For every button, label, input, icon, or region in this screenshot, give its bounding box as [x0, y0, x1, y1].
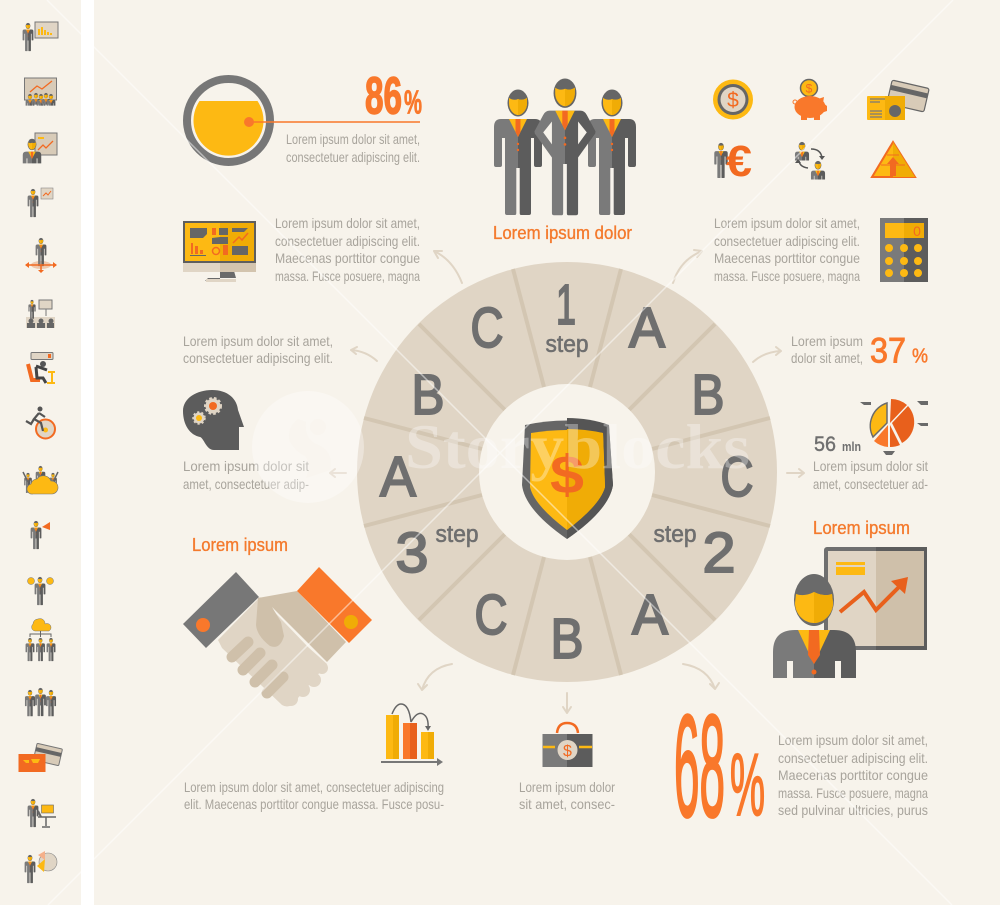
wheel labels: B: [550, 607, 584, 671]
icon: meeting room presenter: [26, 300, 55, 328]
icon: briefcase with dollar: $: [563, 743, 572, 760]
arrow: to monitor block: [434, 251, 462, 283]
icon: person with euro: €: [726, 137, 752, 186]
arrow: to 37 percent: [753, 347, 781, 362]
wheel labels: A: [632, 583, 668, 647]
wheel hub: [479, 384, 655, 560]
text: 68 percent paragraph: [778, 732, 928, 818]
text: pie caption: Lorem ipsum dolor sit: [813, 458, 928, 474]
arrow: to briefcase: [563, 693, 571, 713]
icon: runner with clock target: [26, 406, 55, 438]
wheel labels: step: [436, 521, 478, 548]
text: brain caption: [183, 458, 309, 492]
stat: 37% with caption: dolor sit amet,: [791, 350, 863, 366]
icon: exchange between two people: [795, 142, 825, 180]
text: bar chart caption: elit. Maecenas porttitor congue massa. Fusce posu-: [184, 796, 444, 812]
text: brain caption: Lorem ipsum dolor sit: [183, 458, 309, 474]
icon: presenter with small board: [28, 188, 53, 217]
stat: 86%: %: [404, 84, 422, 120]
icon: team on cloud: [23, 466, 58, 494]
icon: piggy bank: [793, 80, 827, 120]
wheel labels: 1: [556, 273, 576, 337]
sidebar separator band: [81, 0, 94, 905]
icon: cards: [18, 743, 62, 772]
heading: handshake: Lorem ipsum: [192, 535, 288, 555]
icon: bar chart with arcs: [381, 704, 443, 766]
text: briefcase caption: Lorem ipsum dolor: [519, 779, 615, 795]
text: top right paragraph: massa. Fusce posuere, magna: [714, 268, 860, 284]
icon: handshake: [183, 567, 372, 706]
stat: 56 mln: 56: [814, 433, 836, 456]
watermark: Storyblocks: [405, 411, 750, 482]
text: pie caption: amet, consectetuer ad-: [813, 476, 928, 492]
text: bar chart caption: [184, 779, 444, 812]
wheel diagram: [357, 262, 777, 682]
icon: calculator: 0: [913, 223, 921, 239]
icon: presenter with growth board: [773, 547, 927, 678]
wheel labels: C: [470, 296, 504, 360]
wheel labels: A: [380, 445, 416, 509]
arrow: to pie block: [787, 469, 804, 477]
text: gauge caption: Lorem ipsum dolor sit amet,: [286, 131, 420, 147]
text: pie caption: [813, 458, 928, 492]
text: 68 percent paragraph: sed pulvinar ultricies, purus: [778, 802, 928, 818]
icon: pyramid with arrow: [872, 142, 915, 177]
text: top right paragraph: [714, 215, 860, 284]
text: briefcase caption: sit amet, consec-: [519, 796, 615, 812]
icon: tired worker at desk: [28, 352, 55, 383]
wheel spokes: [364, 269, 770, 675]
wheel labels: [380, 273, 754, 671]
text: left short paragraph: [183, 333, 333, 366]
stat: 56 mln: [814, 433, 861, 456]
icon: briefcase with dollar: [542, 723, 592, 767]
text: monitor paragraph: Maecenas porttitor congue: [275, 250, 420, 266]
icon: monitor dashboard: [183, 221, 256, 282]
arrow: to brain block: [330, 469, 346, 477]
icon: shield with dollar: $: [550, 445, 584, 505]
text: left short paragraph: Lorem ipsum dolor sit amet,: [183, 333, 333, 349]
icon: coin: [713, 80, 753, 120]
text: top right paragraph: Lorem ipsum dolor sit amet,: [714, 215, 860, 231]
text: gauge caption: consectetuer adipiscing elit.: [286, 149, 420, 165]
stat: 37% with caption: [791, 332, 928, 370]
icon: person with direction arrows: [25, 238, 57, 273]
text: monitor paragraph: [275, 215, 420, 284]
heading: presenter: Lorem ipsum: [813, 518, 910, 538]
icon: audience with growth board: [24, 78, 56, 106]
icon: person with pie chart: [25, 851, 57, 883]
icon: presenter with chart board: [23, 22, 58, 51]
stat: 68%: [674, 685, 765, 847]
stat: 86%: 86: [365, 68, 402, 126]
icon: coin: $: [727, 89, 739, 112]
heading: team: Lorem ipsum dolor: [493, 223, 632, 243]
arrow: to top right block: [673, 250, 702, 283]
wheel labels: C: [474, 583, 508, 647]
stat: 56 mln: mln: [842, 439, 861, 454]
text: 68 percent paragraph: Maecenas porttitor congue: [778, 767, 928, 783]
icon: calculator: [880, 218, 928, 282]
icon: shield with dollar: [522, 418, 613, 539]
text: 68 percent paragraph: consectetuer adipiscing elit.: [778, 750, 928, 766]
icon: payment cards: [867, 80, 929, 120]
text: left short paragraph: consectetuer adipiscing elit.: [183, 350, 333, 366]
icon: piggy bank: $: [806, 82, 813, 96]
icon: person with two coins: [28, 577, 54, 605]
icon: bust with board: [23, 133, 57, 163]
icon: pie chart bulb: [860, 399, 928, 455]
figure: centre person arms akimbo: [534, 78, 596, 215]
arrow: to left paragraph: [351, 347, 377, 361]
text: top right paragraph: Maecenas porttitor congue: [714, 250, 860, 266]
icon: head with gears: [183, 390, 244, 450]
icon: three business people: [25, 688, 56, 716]
text: top right paragraph: consectetuer adipiscing elit.: [714, 233, 860, 249]
wheel disc: [357, 262, 777, 682]
text: 68 percent paragraph: Lorem ipsum dolor sit amet,: [778, 732, 928, 748]
stat: 37% with caption: Lorem ipsum: [791, 333, 863, 349]
icon: person at desk with screen: [28, 799, 56, 827]
text: brain caption: amet, consectetuer adip-: [183, 476, 309, 492]
wheel labels: 3: [396, 521, 428, 585]
wheel labels: B: [412, 363, 444, 427]
text: monitor paragraph: consectetuer adipiscing elit.: [275, 233, 420, 249]
wheel labels: C: [720, 445, 754, 509]
stat: 37% with caption: %: [912, 346, 928, 368]
wheel labels: B: [692, 363, 724, 427]
wheel labels: step: [654, 521, 696, 548]
wheel labels: A: [629, 296, 665, 360]
text: 68 percent paragraph: massa. Fusce posuere, magna: [778, 785, 928, 801]
arrow: to bar chart: [418, 664, 452, 690]
icon: person with euro: [714, 137, 752, 186]
icon: team of three business people: [494, 78, 636, 215]
icon: cloud with team hierarchy: [26, 619, 55, 661]
stat: 37% with caption: 37: [870, 332, 906, 370]
text: monitor paragraph: Lorem ipsum dolor sit amet,: [275, 215, 420, 231]
text: gauge caption: [286, 131, 420, 165]
wheel labels: step: [546, 331, 588, 358]
text: briefcase caption: [519, 779, 615, 812]
wheel labels: 2: [702, 521, 736, 585]
gauge: 86 percent: [187, 79, 420, 162]
figure: bust: [773, 574, 856, 678]
stat: 68%: 68: [674, 685, 725, 847]
text: bar chart caption: Lorem ipsum dolor sit amet, consectetuer adipiscing: [184, 779, 444, 795]
text: monitor paragraph: massa. Fusce posuere, magna: [275, 268, 420, 284]
sidebar icon column: [18, 22, 62, 883]
text: %: [730, 735, 765, 834]
icon: person with megaphone: [31, 521, 50, 549]
arrow: to 68 percent: [683, 664, 719, 689]
